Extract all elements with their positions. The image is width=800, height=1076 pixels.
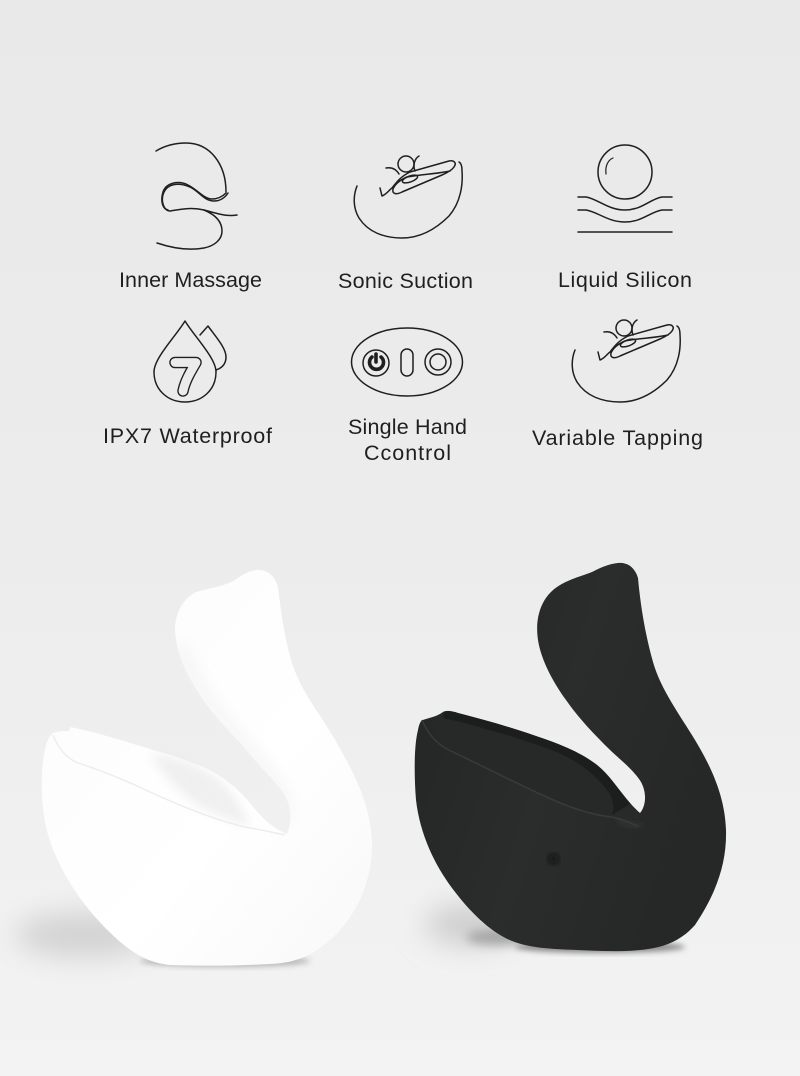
icon: liquid silicon [578, 145, 672, 232]
label: single hand control: Ccontrol [364, 441, 451, 465]
white swan shadow [15, 913, 310, 967]
white swan neck shading [180, 645, 286, 820]
black swan crease highlight [618, 820, 642, 826]
icon: sonic suction [354, 156, 462, 238]
icon: IPX7 waterproof drops [154, 321, 226, 402]
label: single hand control [348, 415, 467, 465]
icon: variable tapping [572, 320, 680, 402]
white swan lip crease [53, 735, 285, 835]
label: single hand control: Single Hand [348, 415, 467, 439]
label: sonic suction: Sonic Suction [338, 269, 473, 293]
icon: inner massage [156, 143, 237, 249]
black swan inner tongue [430, 719, 614, 815]
black swan upper lip [443, 711, 630, 815]
icon: single hand control panel [352, 328, 462, 396]
white swan inner lip [150, 755, 250, 826]
white swan product [42, 570, 372, 966]
label: variable tapping: Variable Tapping [532, 426, 703, 450]
label: IPX7 waterproof: IPX7 Waterproof [103, 424, 272, 448]
black swan button dot [549, 854, 558, 864]
label: liquid silicon: Liquid Silicon [558, 268, 692, 292]
black swan shadow [425, 905, 685, 953]
label: inner massage: Inner Massage [119, 268, 262, 292]
black swan lip highlight [422, 720, 638, 826]
black swan product [415, 563, 726, 951]
